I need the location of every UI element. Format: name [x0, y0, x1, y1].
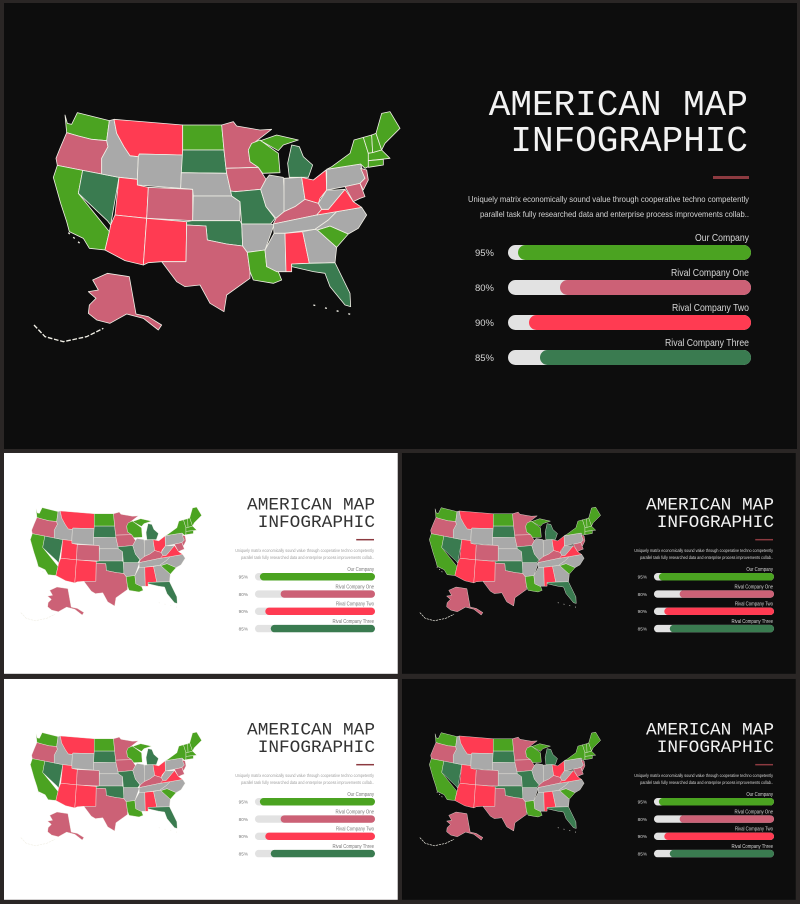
bar row: Our Company: 95%: [475, 248, 495, 259]
bar row: Rival Company Three: Rival Company Three: [665, 337, 749, 349]
panel: dark slide bottom right: 85%: [638, 851, 647, 856]
panel: light slide bottom left: 85%: [239, 851, 248, 856]
panel: main dark slide: [4, 3, 797, 449]
panel: light slide bottom left: Rival Company Three: [333, 844, 374, 850]
panel: light slide top left: Rival Company One: [335, 584, 374, 590]
bar row: Rival Company Three: [475, 337, 751, 365]
panel: light slide top left: 85%: [239, 626, 248, 631]
description text: Uniquely matrix economically sound value through cooperative techno competently: [468, 194, 750, 204]
panel: light slide top left: 90%: [239, 609, 248, 614]
panel: dark slide top right: Uniquely matrix economically sound value through cooperative techno competently: [634, 548, 774, 553]
description text: parallel task fully researched data and enterprise process improvements collab..: [480, 209, 749, 219]
panel: light slide top left: [4, 453, 398, 674]
panel: dark slide bottom right: Rival Company Two: [735, 827, 773, 833]
panel: dark slide top right: parallel task fully researched data and enterprise process improvements collab..: [640, 555, 773, 560]
panel: dark slide top right: [402, 453, 796, 674]
panel: light slide bottom left: parallel task fully researched data and enterprise process improvements collab..: [241, 780, 374, 785]
panel: light slide bottom left: Rival Company Two: [336, 827, 374, 833]
panel: light slide bottom left: Our Company: [347, 792, 374, 798]
panel: dark slide bottom right: 90%: [638, 834, 647, 839]
bar row: Rival Company One: Rival Company One: [671, 267, 749, 279]
panel: light slide bottom left: Rival Company One: [335, 809, 374, 815]
panel: light slide bottom left: AMERICAN MAP: [247, 720, 375, 740]
panel: light slide bottom left: 95%: [239, 799, 248, 804]
bar row: Our Company: [475, 232, 751, 260]
panel: light slide top left: 80%: [239, 592, 248, 597]
panel: dark slide bottom right: Rival Company Three: [732, 844, 773, 850]
bar row: Rival Company One: [475, 267, 751, 295]
panel: dark slide top right: 80%: [638, 592, 647, 597]
bar row: Rival Company One: 80%: [475, 283, 495, 294]
panel: light slide bottom left: INFOGRAPHIC: [258, 738, 375, 758]
accent rule: [713, 176, 749, 179]
panel: dark slide bottom right: Our Company: [746, 792, 773, 798]
panel: dark slide bottom right: parallel task fully researched data and enterprise process improvements collab..: [640, 780, 773, 785]
panel: light slide top left: Our Company: [347, 567, 374, 573]
panel: dark slide top right: Rival Company Three: [732, 619, 773, 625]
panel: dark slide top right: Rival Company One: [734, 584, 773, 590]
panel: light slide top left: AMERICAN MAP: [247, 495, 375, 515]
panel: dark slide top right: 85%: [638, 626, 647, 631]
panel: dark slide top right: 90%: [638, 609, 647, 614]
panel: dark slide top right: Our Company: [746, 567, 773, 573]
panel: dark slide bottom right: 80%: [638, 817, 647, 822]
panel: dark slide bottom right: AMERICAN MAP: [646, 720, 774, 740]
panel: light slide top left: parallel task fully researched data and enterprise process improvements collab..: [241, 555, 374, 560]
panel: dark slide bottom right: INFOGRAPHIC: [657, 738, 774, 758]
panel: dark slide top right: 95%: [638, 574, 647, 579]
panel: light slide top left: INFOGRAPHIC: [258, 513, 375, 533]
panel: dark slide bottom right: Rival Company One: [734, 809, 773, 815]
panel: light slide top left: Uniquely matrix economically sound value through cooperative techno competently: [235, 548, 375, 553]
bar row: Rival Company Two: 90%: [475, 318, 495, 329]
bar row: Our Company: Our Company: [695, 232, 750, 244]
panel: light slide bottom left: Uniquely matrix economically sound value through cooperative techno competently: [235, 773, 375, 778]
panel: light slide bottom left: [4, 679, 398, 900]
title: AMERICAN MAP: [489, 85, 748, 126]
panel: light slide top left: Rival Company Two: [336, 602, 374, 608]
panel: dark slide top right: INFOGRAPHIC: [657, 513, 774, 533]
panel: dark slide bottom right: Uniquely matrix economically sound value through cooperative techno competently: [634, 773, 774, 778]
title: INFOGRAPHIC: [510, 121, 748, 162]
panel: light slide top left: Rival Company Three: [333, 619, 374, 625]
panel: dark slide top right: Rival Company Two: [735, 602, 773, 608]
panel: light slide bottom left: 90%: [239, 834, 248, 839]
panel: light slide bottom left: 80%: [239, 817, 248, 822]
map: United States choropleth: [34, 112, 400, 342]
panel: light slide top left: 95%: [239, 574, 248, 579]
bar row: Rival Company Three: 85%: [475, 353, 495, 364]
panel: dark slide bottom right: [402, 679, 796, 900]
bar row: Rival Company Two: [475, 302, 751, 330]
panel: dark slide top right: AMERICAN MAP: [646, 495, 774, 515]
bar row: Rival Company Two: Rival Company Two: [672, 302, 749, 314]
panel: dark slide bottom right: 95%: [638, 799, 647, 804]
